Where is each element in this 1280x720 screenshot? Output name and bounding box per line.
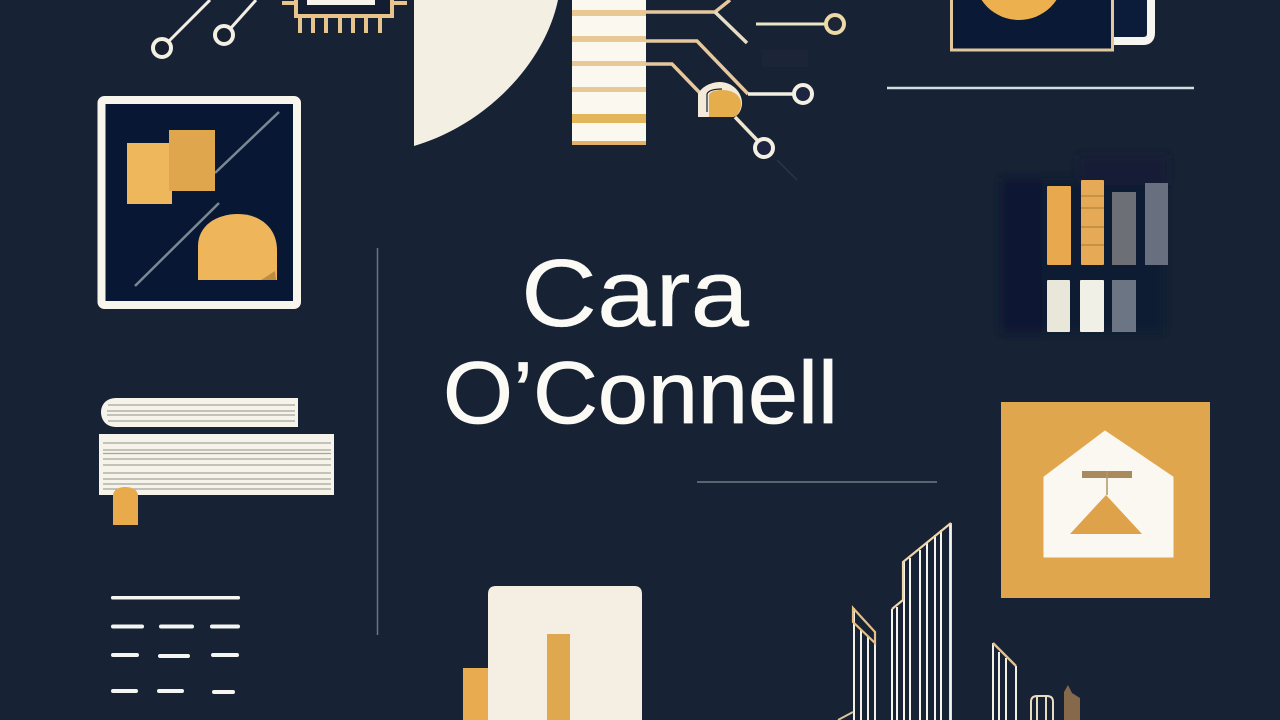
icon: text list lines xyxy=(111,596,240,694)
title: name: Cara xyxy=(521,240,750,347)
icon: stacked books with bookmark xyxy=(99,398,334,525)
icon: striped column with circuit traces xyxy=(572,0,844,180)
icon: document with gold bars xyxy=(463,586,642,720)
icon: gold house panel xyxy=(1001,402,1210,598)
icon: framed shapes panel xyxy=(102,100,297,305)
illustration: city skyline xyxy=(838,523,1080,720)
title: name xyxy=(443,240,838,442)
divider: top right line xyxy=(887,87,1194,89)
shape: cream quarter circle xyxy=(414,0,558,146)
divider: center vertical line xyxy=(376,248,378,635)
chart: bar swatches xyxy=(1000,155,1168,333)
divider: line under title xyxy=(697,481,937,483)
icon: camera mug xyxy=(952,0,1151,50)
title: name: O’Connell xyxy=(443,343,838,442)
icon: circuit nodes and chip xyxy=(153,0,407,57)
